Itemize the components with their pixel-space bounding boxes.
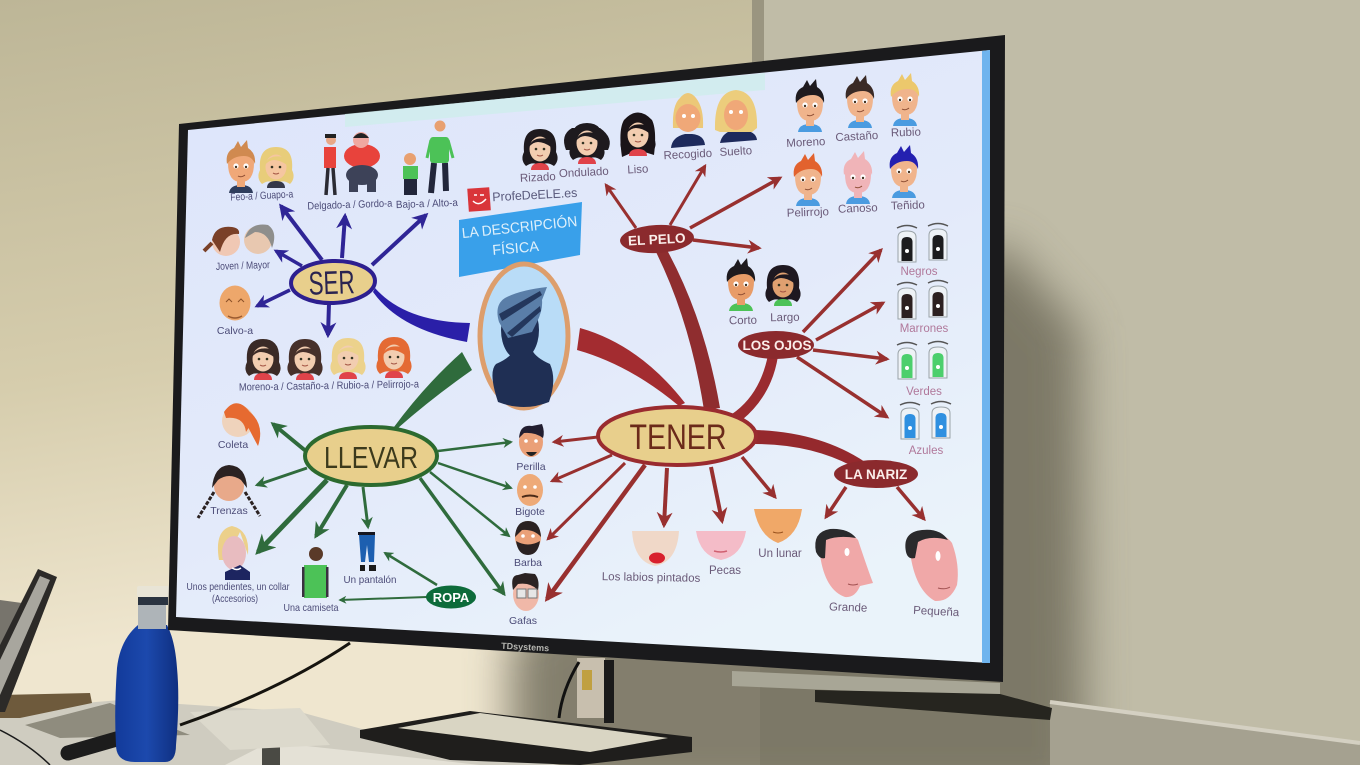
tener: branch to los ojos bbox=[732, 355, 778, 420]
tener: branch to portrait bbox=[577, 328, 685, 406]
eyes: Negros bbox=[897, 224, 948, 278]
hair: Ondulado bbox=[559, 123, 610, 180]
logo: ProfeDeELE.es: ProfeDeELE.es bbox=[492, 186, 578, 204]
hair: Recogido: Recogido bbox=[663, 148, 712, 162]
wood tray and books bbox=[0, 693, 190, 738]
whiteboard edge bbox=[1050, 702, 1360, 743]
hair: Rizado: Rizado bbox=[520, 171, 556, 185]
hair colour: Rubio: Rubio bbox=[891, 126, 921, 140]
mouth: Un lunar: Un lunar bbox=[758, 548, 802, 560]
title banner bbox=[459, 202, 582, 277]
face: Bigote bbox=[515, 474, 545, 518]
eyes: Negros: Negros bbox=[900, 266, 938, 278]
face: Perilla bbox=[516, 424, 546, 473]
node: SER: SER bbox=[308, 263, 355, 302]
portrait bbox=[480, 264, 568, 408]
hair colour: Pelirrojo bbox=[787, 153, 829, 220]
person: Unos pendientes, un collar (Accesorios): Unos pendientes, un collar bbox=[186, 581, 290, 593]
node: EL PELO bbox=[619, 223, 695, 255]
person: Delgado-a / Gordo-a bbox=[307, 132, 393, 212]
person: Feo-a / Guapo-a bbox=[227, 140, 294, 204]
node: EL PELO: EL PELO bbox=[628, 231, 686, 249]
face: Gafas bbox=[509, 573, 539, 627]
node: LOS OJOS bbox=[738, 331, 814, 359]
node: ROPA bbox=[426, 586, 476, 608]
monitor bezel bbox=[168, 35, 1005, 682]
screen right edge bbox=[982, 50, 990, 663]
hair: Liso bbox=[620, 112, 656, 177]
hair colour: Castaño bbox=[835, 75, 879, 144]
eyes: Azules bbox=[900, 402, 951, 457]
ser arrows bbox=[257, 206, 426, 335]
nose: Grande bbox=[815, 529, 873, 615]
person: Delgado-a / Gordo-a: Delgado-a / Gordo-a bbox=[307, 198, 393, 212]
laptop bbox=[0, 569, 57, 712]
hair colour: Canoso: Canoso bbox=[838, 202, 878, 216]
person: Moreno-a / Castaño-a / Rubio-a / Pelirrojo-a bbox=[239, 337, 419, 394]
shelf dark bar bbox=[815, 690, 1052, 720]
garment: Un pantalón bbox=[344, 532, 397, 586]
mouth: Los labios pintados bbox=[602, 531, 701, 585]
hair length: Corto bbox=[727, 258, 757, 327]
water bottle bbox=[115, 586, 178, 762]
face: Bigote: Bigote bbox=[515, 506, 545, 518]
garment: Un pantalón: Un pantalón bbox=[344, 574, 397, 586]
node: ROPA: ROPA bbox=[433, 590, 470, 605]
background: shadow behind the monitor bbox=[510, 240, 1085, 765]
face: Gafas: Gafas bbox=[509, 615, 537, 627]
hair: Suelto: Suelto bbox=[719, 145, 752, 159]
background: right wall bbox=[760, 0, 1360, 765]
ser: branch to portrait bbox=[373, 288, 470, 342]
hair colour: Canoso bbox=[838, 151, 878, 216]
person: Joven / Mayor: Joven / Mayor bbox=[216, 259, 270, 273]
llevar: branch to portrait bbox=[394, 352, 472, 428]
tener: branch to el pelo bbox=[655, 250, 720, 410]
hair colour: Moreno: Moreno bbox=[786, 136, 826, 150]
shelf light strip bbox=[732, 671, 1000, 697]
wall panel seam bbox=[752, 0, 764, 70]
hair: Liso: Liso bbox=[627, 163, 649, 177]
face: Barba bbox=[514, 521, 542, 569]
screen top band bbox=[345, 73, 765, 127]
hair length: Corto: Corto bbox=[729, 315, 757, 327]
table bbox=[0, 700, 560, 765]
whiteboard lower ledge bbox=[1050, 702, 1360, 765]
node: SER bbox=[290, 260, 376, 304]
hair colour: Rubio bbox=[891, 73, 921, 140]
node: TENER: TENER bbox=[630, 418, 726, 457]
hair colour: Castaño: Castaño bbox=[835, 130, 879, 144]
mouth: Pecas bbox=[696, 531, 746, 577]
tener arrows bbox=[547, 166, 924, 599]
hair: Suelto bbox=[715, 90, 757, 159]
logo: ProfeDeELE.es bbox=[467, 186, 578, 212]
monitor stand bbox=[559, 658, 614, 723]
person: Trenzas: Trenzas bbox=[210, 505, 248, 517]
mouth: Un lunar bbox=[754, 509, 802, 560]
screen bbox=[176, 50, 990, 663]
person: Trenzas bbox=[198, 465, 260, 518]
nose: Pequeña: Pequeña bbox=[913, 605, 960, 619]
tener: branch to la nariz bbox=[755, 430, 865, 466]
power cable bbox=[180, 643, 350, 725]
node: LA NARIZ bbox=[834, 460, 918, 488]
node: LA NARIZ: LA NARIZ bbox=[845, 467, 907, 482]
hair colour: Moreno bbox=[786, 79, 826, 150]
node: LLEVAR: LLEVAR bbox=[324, 440, 418, 475]
tablet on stand bbox=[360, 711, 692, 765]
title banner: FÍSICA bbox=[492, 238, 540, 259]
person: Bajo-a / Alto-a: Bajo-a / Alto-a bbox=[396, 197, 458, 211]
person: Unos pendientes, un collar (Accesorios) bbox=[186, 526, 290, 605]
person: Coleta: Coleta bbox=[218, 439, 248, 451]
garment: Una camiseta bbox=[284, 547, 339, 614]
person: Calvo-a: Calvo-a bbox=[217, 325, 253, 337]
llevar arrows bbox=[257, 424, 511, 600]
person: Moreno-a / Castaño-a / Rubio-a / Pelirrojo-a: Moreno-a / Castaño-a / Rubio-a / Pelirrojo-a bbox=[239, 378, 419, 394]
node: LLEVAR bbox=[305, 427, 437, 485]
person: Calvo-a bbox=[217, 286, 253, 337]
hair colour: Pelirrojo: Pelirrojo bbox=[787, 206, 829, 220]
face: Perilla: Perilla bbox=[516, 461, 546, 473]
garment: Una camiseta: Una camiseta bbox=[284, 602, 339, 614]
desk cable bbox=[0, 730, 50, 765]
mouth: Pecas: Pecas bbox=[709, 565, 741, 577]
eyes: Marrones bbox=[897, 280, 949, 335]
node: LOS OJOS: LOS OJOS bbox=[742, 338, 812, 353]
title banner: LA DESCRIPCIÓN bbox=[461, 213, 578, 242]
hair colour: Teñido bbox=[890, 145, 925, 213]
hair: Rizado bbox=[520, 129, 558, 185]
person: Joven / Mayor bbox=[204, 225, 274, 273]
eyes: Verdes bbox=[897, 342, 948, 398]
node: TENER bbox=[598, 407, 756, 465]
hair: Recogido bbox=[663, 93, 712, 162]
nose: Grande: Grande bbox=[829, 601, 867, 615]
nose: Pequeña bbox=[905, 530, 960, 619]
background: wall bbox=[0, 0, 760, 765]
hair: Ondulado: Ondulado bbox=[559, 166, 609, 180]
mouth: Los labios pintados: Los labios pintados bbox=[602, 571, 701, 585]
remote control bbox=[68, 738, 120, 753]
eyes: Azules: Azules bbox=[909, 445, 944, 457]
eyes: Marrones: Marrones bbox=[900, 323, 949, 335]
hair colour: Teñido: Teñido bbox=[891, 199, 925, 213]
person: Bajo-a / Alto-a bbox=[396, 120, 458, 211]
papers bbox=[190, 708, 480, 765]
hair length: Largo bbox=[765, 265, 801, 324]
monitor brand: TDsystems bbox=[501, 641, 549, 653]
person: Feo-a / Guapo-a: Feo-a / Guapo-a bbox=[230, 188, 294, 204]
face: Barba: Barba bbox=[514, 557, 542, 569]
hair length: Largo: Largo bbox=[770, 312, 800, 324]
person: Unos pendientes, un collar (Accesorios): (Accesorios) bbox=[212, 593, 258, 605]
person: Coleta bbox=[218, 403, 260, 451]
eyes: Verdes: Verdes bbox=[906, 386, 942, 398]
